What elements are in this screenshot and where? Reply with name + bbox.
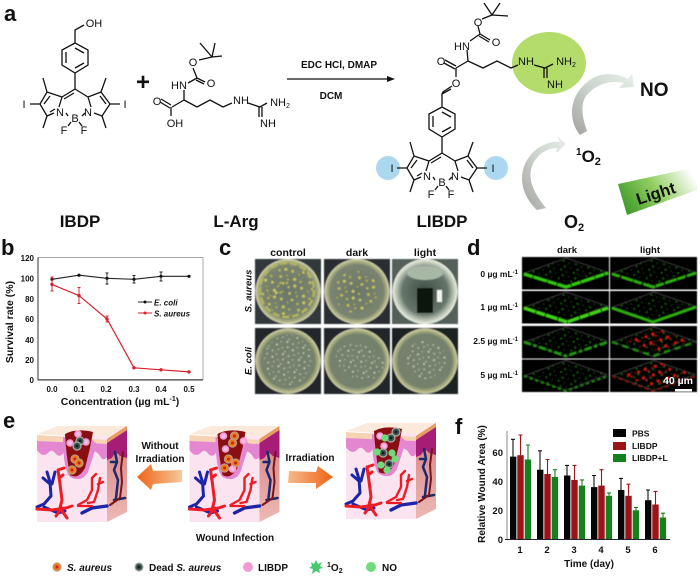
y tick labels: 60 bbox=[492, 448, 503, 459]
axis lines bbox=[38, 258, 203, 380]
singlet oxygen label: 1 bbox=[576, 147, 582, 158]
concentration labels: 2.5 µg mL bbox=[473, 336, 513, 346]
label: irradiation: Irradiation bbox=[286, 453, 334, 464]
series: S. aureus bbox=[50, 277, 191, 374]
molecule: L-Arg: O bbox=[189, 57, 198, 69]
molecule: IBDP: OH bbox=[86, 18, 102, 30]
legend: O bbox=[331, 563, 339, 574]
molecule: IBDP: I bbox=[22, 99, 26, 111]
panel letter e: e bbox=[3, 408, 15, 433]
panel: c petri dishes bbox=[219, 235, 458, 394]
scale bar: 40 µm bbox=[663, 375, 693, 387]
label: without irradiation: Without bbox=[141, 441, 179, 452]
molecule: LIBDP: HN bbox=[454, 41, 470, 53]
panel letter d: d bbox=[467, 235, 480, 260]
legend: 2 bbox=[339, 568, 343, 575]
compound name LIBDP: LIBDP bbox=[416, 212, 468, 231]
legend: LIBDP bbox=[258, 563, 288, 574]
concentration labels: -1 bbox=[513, 270, 519, 276]
x axis title: ) bbox=[176, 396, 179, 408]
molecule: LIBDP: F bbox=[448, 189, 455, 201]
compound name IBDP: IBDP bbox=[60, 212, 100, 231]
concentration labels: -1 bbox=[513, 337, 519, 343]
x tick labels: 6 bbox=[652, 545, 658, 556]
y tick labels: 120 bbox=[21, 254, 35, 263]
legend: LIBDP+L bbox=[632, 453, 668, 463]
row labels: E. coli bbox=[244, 347, 255, 375]
molecule: IBDP: F bbox=[81, 125, 88, 137]
molecule: L-Arg: NH bbox=[260, 118, 276, 130]
molecule: IBDP: N bbox=[84, 107, 92, 119]
NO label: NO bbox=[640, 80, 668, 101]
molecule: IBDP: F bbox=[61, 125, 68, 137]
concentration labels: -1 bbox=[513, 371, 519, 377]
legend: 1 bbox=[327, 562, 331, 569]
y tick labels: 40 bbox=[492, 477, 503, 488]
x axis title: -1 bbox=[169, 396, 176, 403]
y tick labels: 20 bbox=[25, 356, 35, 365]
x tick labels: 0.3 bbox=[128, 385, 140, 394]
reaction arrow with conditions: EDC HCl, DMAP bbox=[301, 60, 377, 71]
legend: Dead S. aureus bbox=[149, 563, 222, 574]
curved arrow to singlet oxygen bbox=[522, 136, 566, 210]
singlet oxygen label: 2 bbox=[595, 156, 601, 168]
legend: PBS bbox=[632, 428, 650, 438]
concentration labels bbox=[473, 269, 519, 380]
molecule: IBDP bbox=[22, 18, 127, 137]
molecule: L-Arg: O bbox=[207, 78, 216, 90]
y tick labels bbox=[21, 254, 35, 385]
molecule: LIBDP: N bbox=[451, 171, 459, 183]
arrow: without irradiation bbox=[137, 464, 182, 490]
y tick labels: 40 bbox=[25, 336, 35, 345]
molecule: LIBDP: I bbox=[491, 163, 495, 175]
column headings: dark bbox=[346, 247, 368, 259]
panel: b survival chart bbox=[1, 235, 203, 408]
reaction arrow with conditions bbox=[287, 60, 395, 102]
legend: NO bbox=[382, 563, 397, 574]
molecule: LIBDP: O bbox=[492, 37, 501, 49]
x axis title: Time (day) bbox=[564, 559, 614, 570]
panel letter a: a bbox=[4, 1, 17, 26]
legend: LIBDP bbox=[632, 441, 658, 451]
x axis title: Concentration (µg mL bbox=[61, 396, 169, 408]
legend bbox=[613, 428, 668, 463]
bars: PBS bbox=[510, 457, 651, 539]
y tick labels bbox=[492, 448, 503, 546]
molecule: L-Arg: OH bbox=[167, 118, 183, 130]
axis frame bbox=[38, 258, 203, 380]
x tick labels: 0.2 bbox=[100, 385, 112, 394]
panel letter c: c bbox=[219, 235, 231, 260]
light wedge bbox=[618, 167, 697, 215]
molecule: LIBDP: B bbox=[438, 177, 446, 189]
bars: LIBDP bbox=[517, 455, 659, 539]
panel: f wound area bar chart bbox=[455, 414, 670, 570]
oxygen label: O bbox=[564, 212, 578, 232]
oxygen label: 2 bbox=[578, 222, 584, 234]
curved arrow to NO bbox=[572, 74, 634, 135]
panel: d confocal images bbox=[467, 235, 697, 392]
x tick labels: 5 bbox=[625, 545, 631, 556]
label: wound infection: Wound Infection bbox=[196, 533, 274, 544]
label: without irradiation: Irradiation bbox=[136, 454, 184, 465]
concentration labels: -1 bbox=[513, 303, 519, 309]
legend: S. aureus bbox=[67, 563, 112, 574]
confocal image grid bbox=[522, 257, 697, 392]
panel: a synthesis scheme bbox=[4, 1, 697, 234]
x tick labels: 0.5 bbox=[183, 385, 195, 394]
molecule: LIBDP: O bbox=[437, 56, 446, 68]
molecule: LIBDP: F bbox=[428, 189, 435, 201]
molecule: L-Arg: HN bbox=[171, 80, 187, 92]
molecule: LIBDP: N bbox=[423, 171, 431, 183]
y tick labels: 80 bbox=[25, 295, 35, 304]
dish grid bbox=[255, 259, 458, 394]
plus sign: + bbox=[136, 69, 150, 96]
y tick labels: 0 bbox=[30, 376, 35, 385]
highlight: iodine left bbox=[376, 156, 400, 180]
row labels: S. aureus bbox=[244, 270, 255, 312]
reaction arrow with conditions: DCM bbox=[320, 91, 342, 102]
legend: E. coli bbox=[154, 298, 178, 308]
skin block: wound infection bbox=[190, 426, 280, 522]
arrow: irradiation bbox=[288, 466, 333, 489]
molecule: LIBDP: O bbox=[452, 78, 461, 90]
x tick labels: 0.1 bbox=[73, 385, 85, 394]
column headings bbox=[557, 245, 661, 256]
molecule: L-Arg: NH bbox=[233, 95, 249, 107]
molecule: L-Arg: 2 bbox=[286, 103, 290, 110]
column headings: light bbox=[640, 245, 661, 256]
error bars bbox=[511, 435, 665, 518]
molecule: L-Arg: NH bbox=[270, 97, 286, 109]
x tick labels bbox=[46, 385, 195, 394]
singlet oxygen label: O bbox=[582, 147, 595, 166]
x tick labels: 1 bbox=[517, 545, 523, 556]
bars: LIBDP+L bbox=[525, 460, 666, 539]
column headings bbox=[270, 247, 437, 259]
legend bbox=[138, 298, 191, 318]
molecule: LIBDP: I bbox=[390, 163, 394, 175]
panel: e wound infection schematic bbox=[3, 408, 436, 575]
axes bbox=[506, 431, 508, 540]
molecule: LIBDP bbox=[390, 3, 576, 201]
y tick labels: 60 bbox=[25, 315, 35, 324]
skin block: irradiation bbox=[346, 423, 436, 519]
x tick labels: 0.4 bbox=[155, 385, 167, 394]
molecule: LIBDP: O bbox=[474, 17, 483, 29]
concentration labels: 0 µg mL bbox=[480, 269, 513, 279]
y tick labels: 100 bbox=[21, 274, 35, 284]
y axis title: Relative Wound Area (%) bbox=[477, 425, 488, 543]
molecule: L-Arg: O bbox=[153, 96, 162, 108]
panel letter f: f bbox=[455, 414, 463, 439]
highlight: guanidine green circle bbox=[512, 32, 586, 94]
molecule: IBDP: N bbox=[56, 107, 64, 119]
y axis title: Survival rate (%) bbox=[4, 281, 16, 363]
column headings: control bbox=[270, 247, 306, 259]
molecule: LIBDP: NH bbox=[518, 56, 534, 68]
x tick labels: 4 bbox=[598, 545, 604, 556]
molecule: L-Arg bbox=[153, 43, 290, 130]
x tick labels bbox=[517, 545, 658, 556]
concentration labels: 1 µg mL bbox=[480, 302, 513, 312]
column headings: dark bbox=[557, 245, 578, 256]
series: E. coli bbox=[50, 272, 191, 284]
skin block: without irradiation bbox=[37, 426, 127, 522]
molecule: IBDP: B bbox=[71, 113, 79, 125]
y tick labels: 20 bbox=[492, 506, 503, 517]
x tick labels: 3 bbox=[571, 545, 577, 556]
column headings: light bbox=[414, 247, 437, 259]
molecule: LIBDP: 2 bbox=[572, 62, 576, 69]
highlight: iodine right bbox=[484, 156, 508, 180]
x tick labels: 2 bbox=[544, 545, 550, 556]
legend: S. aureus bbox=[154, 310, 191, 318]
compound name L-Arg: L-Arg bbox=[213, 212, 259, 231]
molecule: LIBDP: NH bbox=[547, 79, 563, 91]
row labels bbox=[244, 270, 255, 375]
legend bbox=[52, 560, 397, 575]
x tick labels: 0.0 bbox=[46, 385, 58, 394]
concentration labels: 5 µg mL bbox=[480, 370, 513, 380]
light label: Light bbox=[634, 179, 678, 209]
y tick labels: 0 bbox=[498, 535, 503, 546]
panel letter b: b bbox=[1, 235, 14, 260]
molecule: LIBDP: NH bbox=[556, 56, 572, 68]
molecule: IBDP: I bbox=[123, 99, 127, 111]
